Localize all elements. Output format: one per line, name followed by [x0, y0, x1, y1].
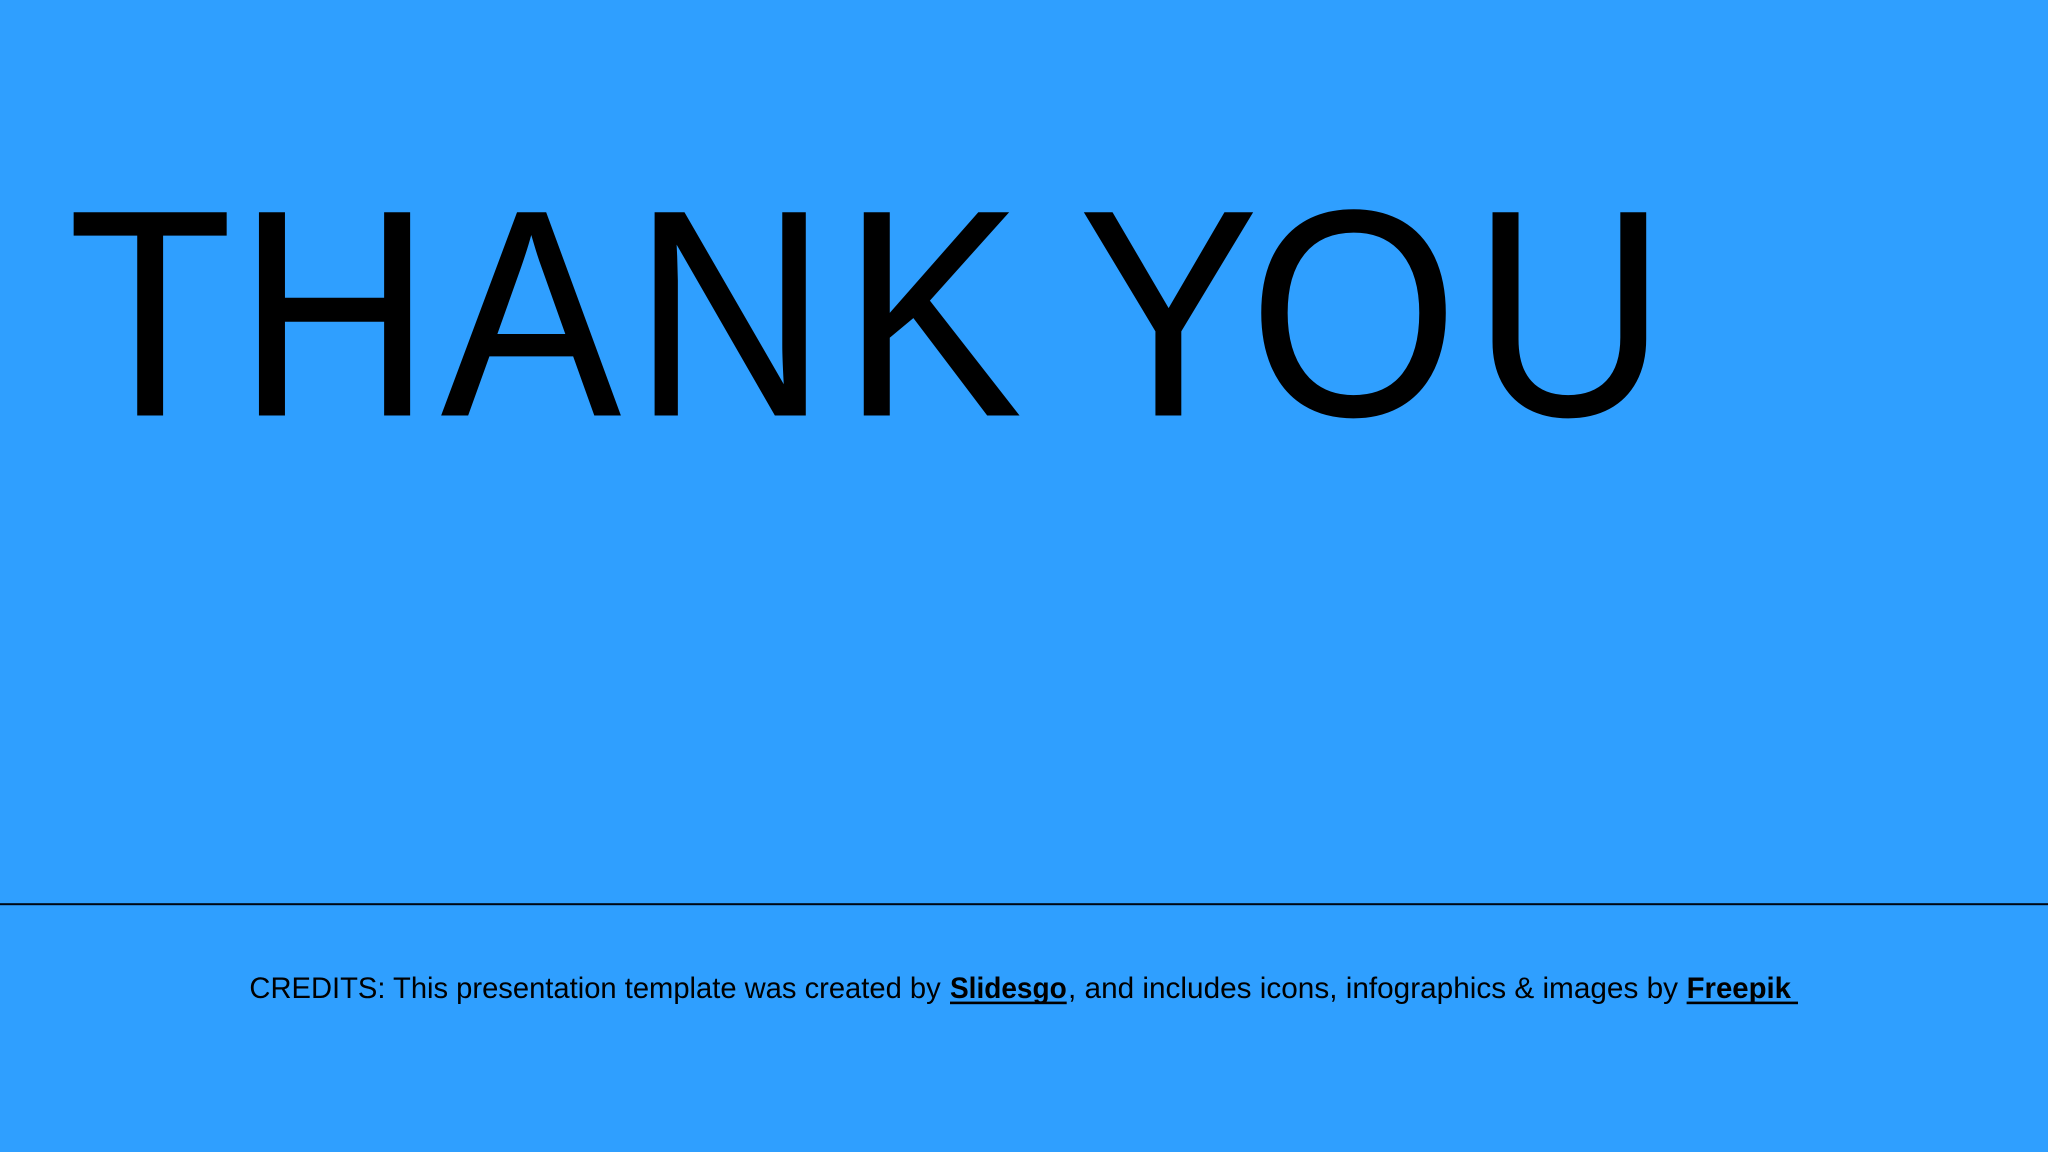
credits text: CREDITS: This presentation template was created by: [249, 972, 941, 1005]
credits text: [249, 972, 1798, 1005]
title: thank you: THANK YOU: [68, 149, 1667, 478]
credits text: , and includes icons, infographics & images by: [1068, 972, 1678, 1005]
credits text: Freepik: [1687, 972, 1791, 1005]
credits text: Slidesgo: [950, 972, 1067, 1005]
